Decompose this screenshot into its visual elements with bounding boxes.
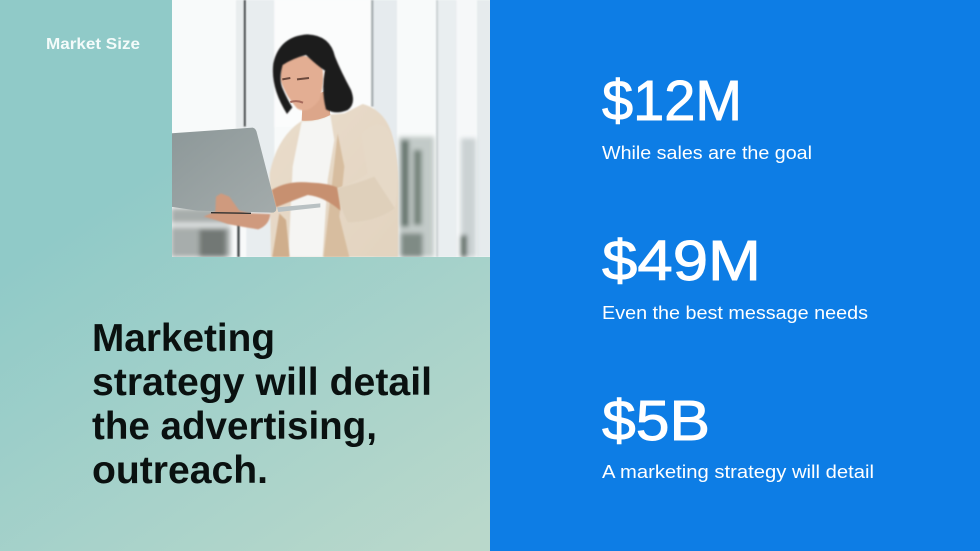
hair (273, 34, 353, 114)
rolled sleeve (338, 186, 342, 188)
stat: $12M: While sales are the goal (602, 142, 812, 163)
panel: teal left background (0, 0, 490, 551)
stat: $49M (602, 229, 868, 323)
stat: $49M: $49M (602, 229, 761, 293)
headline: marketing strategy: Marketing (92, 317, 275, 360)
photo: man using a laptop by the window (171, 0, 491, 257)
label: Market Size: Market Size (46, 36, 140, 53)
figure: man (171, 34, 398, 257)
stat: $49M: Even the best message needs (602, 302, 868, 323)
stat: $5B: $5B (602, 389, 710, 453)
headline: marketing strategy: strategy will detail (92, 361, 432, 404)
headline: marketing strategy: outreach. (92, 449, 268, 492)
panel: blue right background (490, 0, 980, 551)
eyes and mouth (282, 78, 309, 79)
stat: $5B: A marketing strategy will detail (602, 461, 874, 482)
window view: right (399, 137, 476, 257)
neck and face (302, 90, 330, 121)
stat: $12M (602, 69, 812, 163)
headline: marketing strategy (92, 317, 432, 492)
window view: left (171, 208, 230, 257)
forearm and hand typing (272, 182, 340, 211)
stat: $12M: $12M (602, 69, 742, 133)
hand under laptop (204, 193, 270, 229)
shirt jacket (270, 104, 398, 257)
headline: marketing strategy: the advertising, (92, 405, 377, 448)
laptop base (277, 203, 320, 212)
laptop lid (171, 128, 276, 213)
stat: $5B (602, 389, 874, 482)
jacket inner panel (324, 133, 349, 257)
white t-shirt (288, 115, 334, 257)
